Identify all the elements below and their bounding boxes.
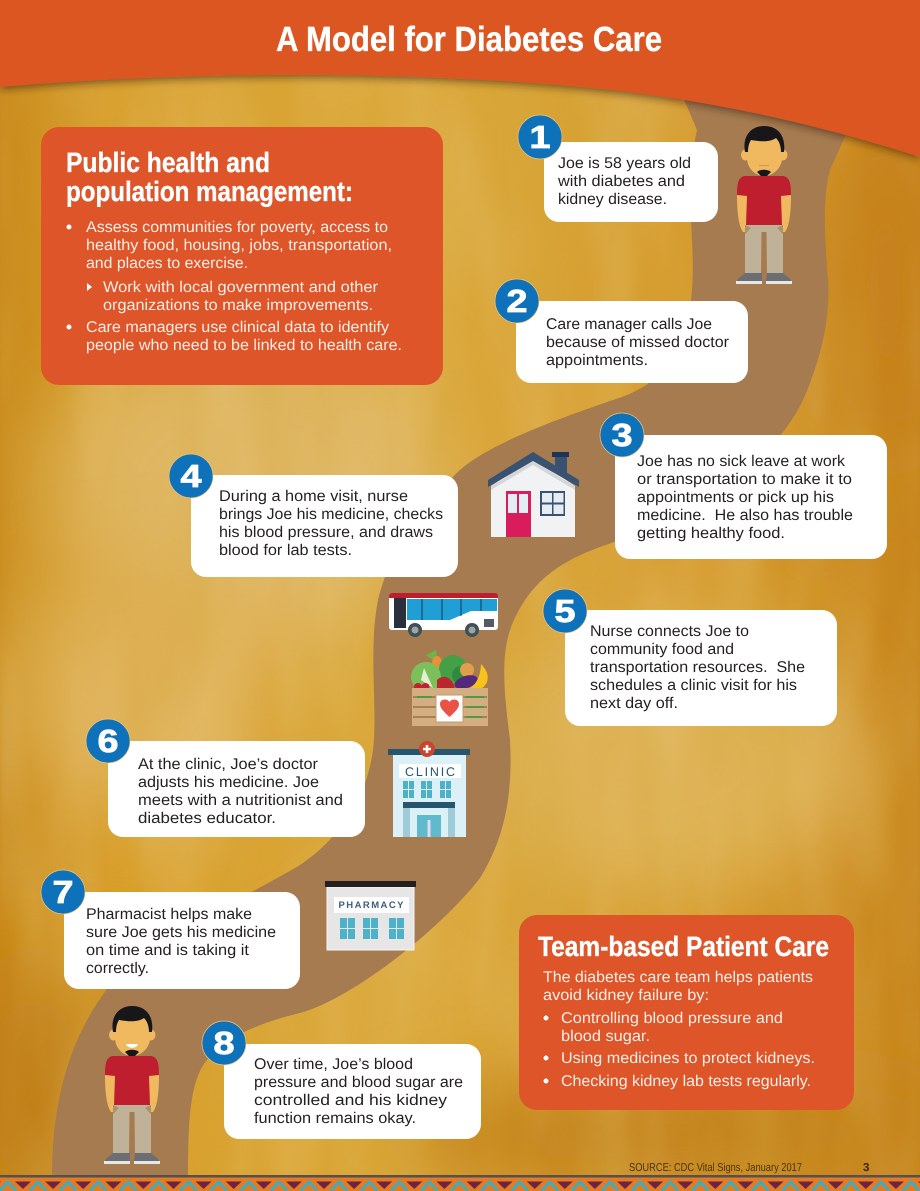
badge 5 (543, 589, 587, 633)
step 4 text: brings Joe his medicine, checks (219, 506, 443, 523)
icon: Joe, smiling (104, 1006, 160, 1164)
step 8 text: pressure and blood sugar are (254, 1074, 463, 1091)
panel bullets: organizations to make improvements. (103, 297, 373, 314)
badge 6: 6 (98, 723, 118, 759)
step 1 (518, 115, 718, 222)
panel bullets: Assess communities for poverty, access to (86, 219, 388, 236)
badge 6 (86, 719, 130, 763)
step 7 text: sure Joe gets his medicine (86, 924, 276, 941)
step 5 text: schedules a clinic visit for his (590, 677, 797, 694)
icon: bus (389, 593, 498, 637)
panel text (543, 969, 815, 1090)
panel: public health and population management (41, 127, 443, 385)
badge 7 (41, 870, 85, 914)
panel heading (66, 147, 353, 207)
badge 3: 3 (612, 417, 632, 453)
step 6 text: diabetes educator. (138, 810, 276, 827)
step 2 (495, 279, 748, 383)
step 3 text: medicine. He also has trouble (637, 507, 853, 524)
step 6 text: At the clinic, Joe’s doctor (138, 756, 318, 773)
step 7 text: on time and is taking it (86, 942, 250, 959)
panel: team-based patient care (519, 915, 854, 1110)
step 2 text: because of missed doctor (546, 334, 729, 351)
step 3 text: or transportation to make it to (637, 471, 852, 488)
step 2 text (546, 316, 729, 369)
step 2 text: Care manager calls Joe (546, 316, 712, 333)
step 5 text: Nurse connects Joe to (590, 623, 749, 640)
badge 7: 7 (52, 874, 74, 910)
title: A Model for Diabetes Care (276, 20, 662, 59)
icon: pharmacy (325, 881, 416, 950)
icon: clinic (388, 741, 470, 837)
badge 1 (518, 115, 562, 159)
panel bullets: Care managers use clinical data to identify (86, 319, 389, 336)
panel text: Using medicines to protect kidneys. (561, 1050, 815, 1067)
step 4 text: his blood pressure, and draws (219, 524, 433, 541)
panel heading: Team-based Patient Care (538, 931, 829, 962)
badge 4: 4 (180, 458, 202, 494)
badge 8: 8 (214, 1025, 234, 1061)
panel text: Controlling blood pressure and (561, 1010, 783, 1027)
icon: food crate (411, 650, 488, 726)
step 6 (86, 719, 365, 837)
step 8 text: controlled and his kidney (254, 1092, 447, 1109)
source line: SOURCE: CDC Vital Signs, January 2017 (629, 1162, 802, 1174)
step 6 text: meets with a nutritionist and (138, 792, 343, 809)
step 4 text (219, 488, 443, 559)
step 3 text (637, 453, 853, 542)
step 1 text: kidney disease. (558, 191, 667, 208)
step 5 text: community food and (590, 641, 734, 658)
icon: pharmacy: PHARMACY (338, 900, 404, 911)
step 4 text: During a home visit, nurse (219, 488, 408, 505)
step 5 text (590, 623, 805, 712)
page number: 3 (863, 1162, 869, 1174)
step 4 (169, 454, 458, 577)
step 3 text: Joe has no sick leave at work (637, 453, 845, 470)
step 8 text (254, 1056, 463, 1127)
step 6 text: adjusts his medicine. Joe (138, 774, 319, 791)
badge 2: 2 (506, 283, 528, 319)
step 4 text: blood for lab tests. (219, 542, 352, 559)
step 2 text: appointments. (546, 352, 648, 369)
panel heading: Public health and (66, 147, 270, 178)
step 7 (41, 870, 300, 989)
step 6 text (138, 756, 343, 827)
panel text: blood sugar. (561, 1028, 650, 1045)
step 8 (202, 1021, 481, 1139)
panel text: The diabetes care team helps patients (543, 969, 813, 986)
step 5 text: next day off. (590, 695, 678, 712)
panel text: avoid kidney failure by: (543, 987, 709, 1004)
badge 8 (202, 1021, 246, 1065)
step 8 text: function remains okay. (254, 1110, 416, 1127)
step 1 text: with diabetes and (557, 173, 685, 190)
step 7 text (86, 906, 276, 977)
badge 4 (169, 454, 213, 498)
panel text: Checking kidney lab tests regularly. (561, 1073, 811, 1090)
header banner (0, 0, 920, 157)
panel heading: population management: (66, 176, 353, 207)
step 3 text: getting healthy food. (637, 525, 785, 542)
step 1 text: Joe is 58 years old (558, 155, 691, 172)
panel bullets: Work with local government and other (103, 279, 378, 296)
step 5 (543, 589, 837, 726)
patterned footer border (0, 1175, 920, 1191)
step 8 text: Over time, Joe’s blood (254, 1056, 413, 1073)
icon: clinic: CLINIC (405, 765, 455, 779)
step 7 text: correctly. (86, 960, 149, 977)
panel bullets (66, 219, 402, 354)
badge 3 (600, 413, 644, 457)
step 5 text: transportation resources. She (590, 659, 805, 676)
step 7 text: Pharmacist helps make (86, 906, 252, 923)
panel bullets: and places to exercise. (86, 255, 248, 272)
badge 1: 1 (530, 119, 550, 155)
winding brown path (52, 90, 850, 1176)
icon: house (488, 452, 579, 537)
panel bullets: healthy food, housing, jobs, transportation, (86, 237, 392, 254)
badge 5: 5 (554, 593, 576, 629)
step 1 text (557, 155, 691, 208)
step 3 (600, 413, 887, 559)
step 3 text: appointments or pick up his (637, 489, 834, 506)
icon: Joe, neutral (736, 126, 792, 284)
badge 2 (495, 279, 539, 323)
panel bullets: people who need to be linked to health care. (86, 337, 402, 354)
